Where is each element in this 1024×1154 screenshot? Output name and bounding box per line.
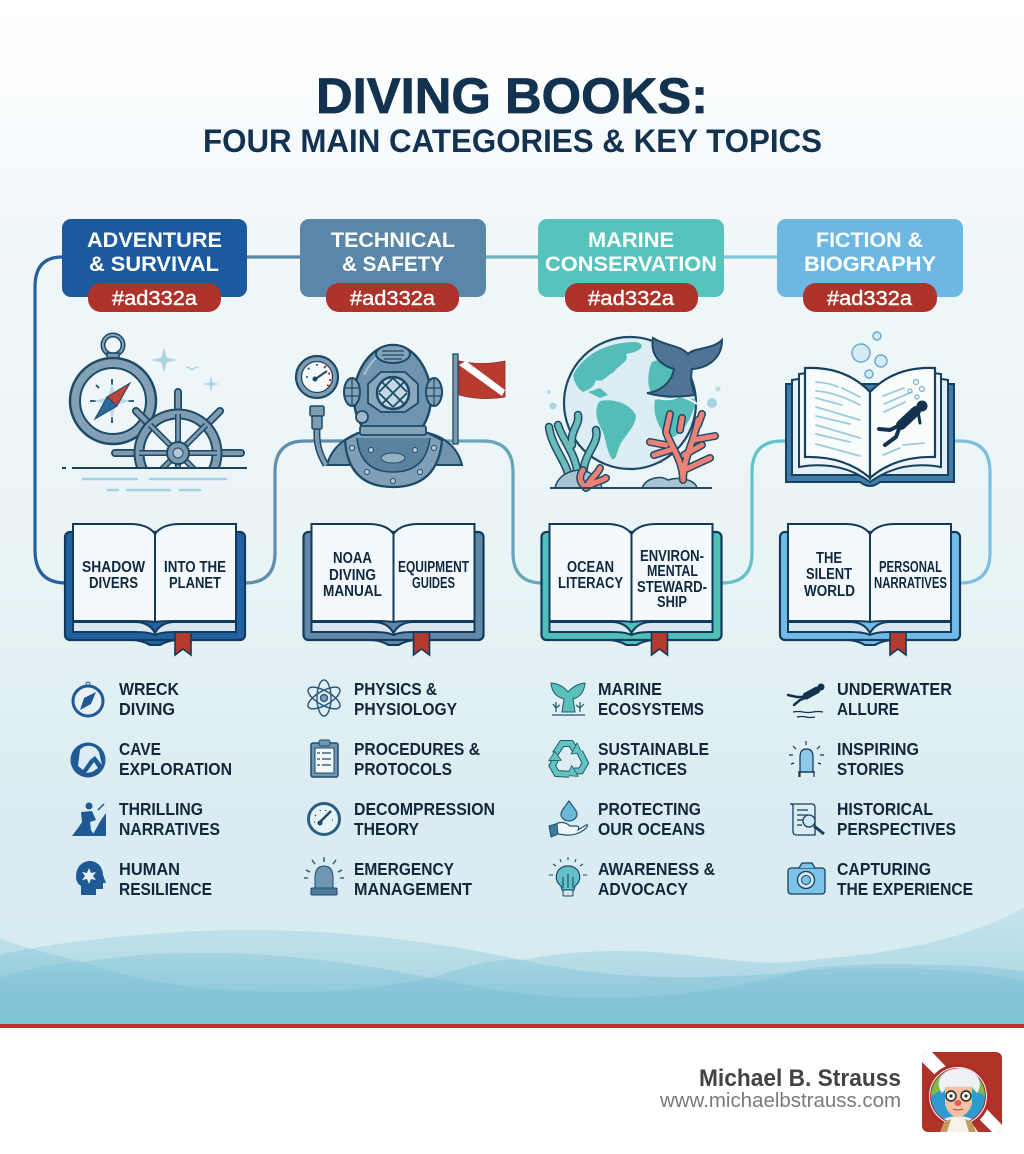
text: marine ecosystems (598, 679, 704, 719)
text: awareness and advocacy (598, 859, 715, 899)
text: marine ecosystems: MARINE (598, 679, 662, 699)
text: cave exploration: EXPLORATION (119, 759, 232, 779)
book: technical and safety titles (304, 524, 484, 655)
text: inspiring stories: STORIES (837, 759, 904, 779)
text: protecting our oceans (598, 799, 705, 839)
illustration: globe, whale tail and coral (547, 337, 722, 488)
book: fiction and biography titles: WORLD (804, 583, 855, 600)
text: thrilling narratives: NARRATIVES (119, 819, 220, 839)
icon: camera (788, 863, 825, 894)
book: adventure and survival titles: PLANET (169, 575, 221, 592)
topic list: adventure and survival (70, 679, 232, 899)
text: inspiring stories: INSPIRING (837, 739, 919, 759)
book: technical and safety titles: NOAA (333, 550, 372, 567)
book: marine conservation titles: MENTAL (647, 563, 698, 580)
icon: clipboard (311, 740, 338, 777)
title: DIVING BOOKS: (316, 68, 708, 124)
text: procedures and protocols (354, 739, 480, 779)
text: historical perspectives (837, 799, 956, 839)
text: protecting our oceans: PROTECTING (598, 799, 701, 819)
text: wreck diving: WRECK (119, 679, 179, 699)
category header: marine conservation: #ad332a (588, 288, 675, 310)
text: physics and physiology: PHYSIOLOGY (354, 699, 457, 719)
category header: technical and safety: & SAFETY (342, 253, 444, 276)
icon: scroll with magnifier (790, 804, 824, 835)
text: decompression theory (354, 799, 495, 839)
text: human resilience (119, 859, 212, 899)
category header: marine conservation: CONSERVATION (545, 253, 717, 276)
book: fiction and biography titles: PERSONAL (879, 559, 942, 576)
connector lines (35, 257, 990, 583)
illustration: compass and ship wheel (62, 335, 247, 492)
book: technical and safety titles: MANUAL (323, 583, 382, 600)
text: capturing the experience: CAPTURING (837, 859, 931, 879)
text: decompression theory: DECOMPRESSION (354, 799, 495, 819)
text: thrilling narratives (119, 799, 220, 839)
text: wreck diving (119, 679, 179, 719)
book: adventure and survival titles: INTO THE (164, 559, 226, 576)
category header: adventure and survival: #ad332a (112, 288, 198, 310)
book: marine conservation titles: ENVIRON- (640, 548, 704, 565)
category header: fiction and biography: BIOGRAPHY (804, 253, 936, 276)
icon: recycle (546, 743, 589, 781)
logo (922, 1052, 1002, 1132)
icon: atom (305, 680, 343, 716)
book: technical and safety titles: EQUIPMENT (398, 559, 469, 576)
category header: fiction and biography: FICTION & (816, 229, 923, 252)
text: procedures and protocols: PROTOCOLS (354, 759, 452, 779)
topic list: marine conservation (546, 679, 715, 899)
text: sustainable practices (598, 739, 709, 779)
illustration: open book with diver and bubbles (786, 332, 954, 486)
text: human resilience: RESILIENCE (119, 879, 212, 899)
icon: pressure gauge (308, 804, 340, 834)
category header: technical and safety (300, 219, 486, 312)
category header: adventure and survival: ADVENTURE (87, 229, 222, 252)
category header: technical and safety: TECHNICAL (331, 229, 455, 252)
book: marine conservation titles: OCEAN (567, 559, 614, 576)
text: capturing the experience: THE EXPERIENCE (837, 879, 973, 899)
text: underwater allure: ALLURE (837, 699, 899, 719)
book: adventure and survival titles: DIVERS (89, 575, 138, 592)
book: adventure and survival titles: SHADOW (82, 559, 145, 576)
category header: technical and safety: #ad332a (350, 288, 436, 310)
category header: marine conservation (538, 219, 724, 312)
text: cave exploration (119, 739, 232, 779)
text: underwater allure: UNDERWATER (837, 679, 952, 699)
icon: inspiration beacon (789, 741, 824, 777)
footer band (0, 1024, 1024, 1028)
text: inspiring stories (837, 739, 919, 779)
category header: fiction and biography (777, 219, 963, 312)
text: awareness and advocacy: ADVOCACY (598, 879, 688, 899)
illustration: diving helmet, gauge and dive flag (296, 345, 505, 487)
text: historical perspectives: PERSPECTIVES (837, 819, 956, 839)
icon: climber (72, 802, 106, 836)
category header: adventure and survival: & SURVIVAL (89, 253, 219, 276)
text: human resilience: HUMAN (119, 859, 180, 879)
text: capturing the experience (837, 859, 973, 899)
book: adventure and survival titles (65, 524, 245, 655)
text: physics and physiology: PHYSICS & (354, 679, 437, 699)
book: fiction and biography titles: THE (816, 550, 842, 567)
category header: adventure and survival (62, 219, 247, 312)
text: emergency management: EMERGENCY (354, 859, 454, 879)
text: wreck diving: DIVING (119, 699, 175, 719)
waves (0, 907, 1024, 1024)
subtitle: FOUR MAIN CATEGORIES & KEY TOPICS (203, 123, 822, 159)
text: cave exploration: CAVE (119, 739, 161, 759)
book: marine conservation titles (542, 524, 722, 655)
book: technical and safety titles: DIVING (329, 567, 376, 584)
icon: compass (73, 682, 103, 716)
text: decompression theory: THEORY (354, 819, 419, 839)
text: historical perspectives: HISTORICAL (837, 799, 933, 819)
text: procedures and protocols: PROCEDURES & (354, 739, 480, 759)
icon: diver silhouette (788, 684, 824, 718)
icon: whale fluke (551, 683, 585, 715)
book: fiction and biography titles: NARRATIVES (874, 575, 947, 592)
text: sustainable practices: SUSTAINABLE (598, 739, 709, 759)
category header: marine conservation: MARINE (588, 229, 674, 252)
icon: water drop over hand (549, 801, 588, 837)
icon: emergency beacon (304, 857, 344, 895)
text: marine ecosystems: ECOSYSTEMS (598, 699, 704, 719)
book: marine conservation titles: LITERACY (558, 575, 624, 592)
footer website: www.michaelbstrauss.com (659, 1090, 901, 1112)
footer author name: Michael B. Strauss (699, 1065, 901, 1092)
book: technical and safety titles: GUIDES (412, 575, 455, 592)
text: awareness and advocacy: AWARENESS & (598, 859, 715, 879)
book: fiction and biography titles: SILENT (806, 566, 852, 583)
text: physics and physiology (354, 679, 457, 719)
icon: light bulb (549, 857, 587, 896)
book: fiction and biography titles (780, 524, 960, 655)
text: thrilling narratives: THRILLING (119, 799, 203, 819)
text: protecting our oceans: OUR OCEANS (598, 819, 705, 839)
category header: fiction and biography: #ad332a (827, 288, 913, 310)
topic list: technical and safety (304, 679, 495, 899)
icon: head with star (76, 861, 106, 895)
topic list: fiction and biography (788, 679, 973, 899)
icon: cave (70, 742, 106, 778)
text: emergency management (354, 859, 472, 899)
book: marine conservation titles: SHIP (657, 594, 687, 611)
text: underwater allure (837, 679, 952, 719)
text: sustainable practices: PRACTICES (598, 759, 687, 779)
text: emergency management: MANAGEMENT (354, 879, 472, 899)
book: marine conservation titles: STEWARD- (637, 579, 707, 596)
